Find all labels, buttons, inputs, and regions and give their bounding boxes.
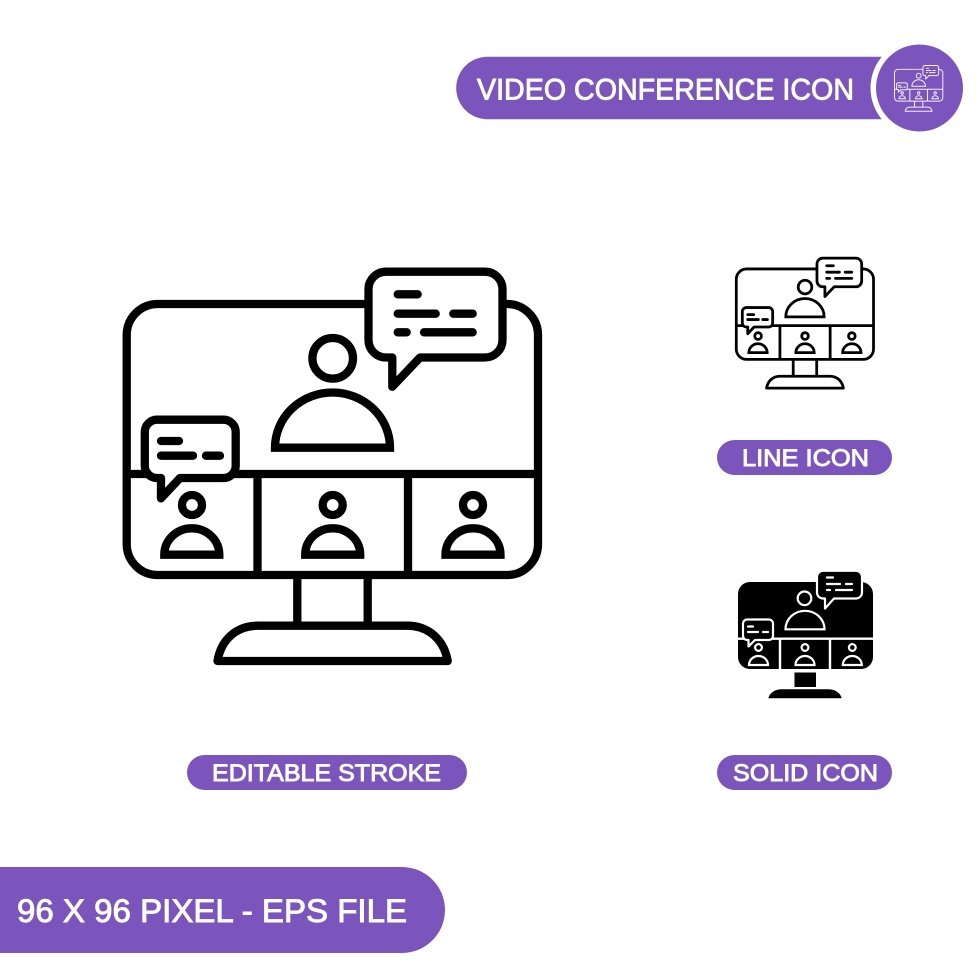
- footer banner: pixel size: 96 X 96 PIXEL - EPS FILE: [17, 893, 407, 929]
- solid stand: [794, 672, 816, 687]
- screen dividers: [127, 474, 538, 575]
- solid presenter: [786, 592, 824, 629]
- icon: line version: [736, 258, 874, 388]
- solid participants: [749, 644, 862, 665]
- title: VIDEO CONFERENCE ICON: [477, 74, 854, 106]
- monitor screen: [127, 304, 538, 575]
- solid small bubble: [743, 620, 773, 646]
- main presenter: [275, 338, 390, 448]
- solid screen: [738, 582, 873, 669]
- monitor stand: [297, 575, 368, 625]
- participant 1: [164, 495, 219, 555]
- participant 2: [305, 495, 360, 555]
- monitor base: [218, 626, 448, 661]
- label: solid icon: SOLID ICON: [733, 760, 878, 787]
- label: line icon: LINE ICON: [742, 445, 869, 472]
- solid dividers: [738, 639, 873, 669]
- large speech bubble: [368, 272, 502, 387]
- label: editable stroke: [187, 755, 467, 790]
- label: editable stroke: EDITABLE STROKE: [212, 760, 441, 787]
- icon: main video conference monitor: [127, 272, 538, 661]
- label: line icon: [717, 440, 892, 475]
- small speech bubble: [145, 420, 236, 498]
- header banner: [456, 39, 968, 137]
- icon: header monitor: [894, 66, 943, 111]
- label: solid icon: [717, 755, 892, 790]
- header pill: [456, 57, 900, 119]
- footer banner: pixel size: [0, 867, 445, 953]
- participant 3: [446, 495, 500, 555]
- icon: solid version: [738, 571, 873, 698]
- header circle: [876, 44, 963, 132]
- solid large bubble: [817, 571, 862, 608]
- header ring gap: [870, 39, 968, 137]
- solid base: [768, 689, 842, 698]
